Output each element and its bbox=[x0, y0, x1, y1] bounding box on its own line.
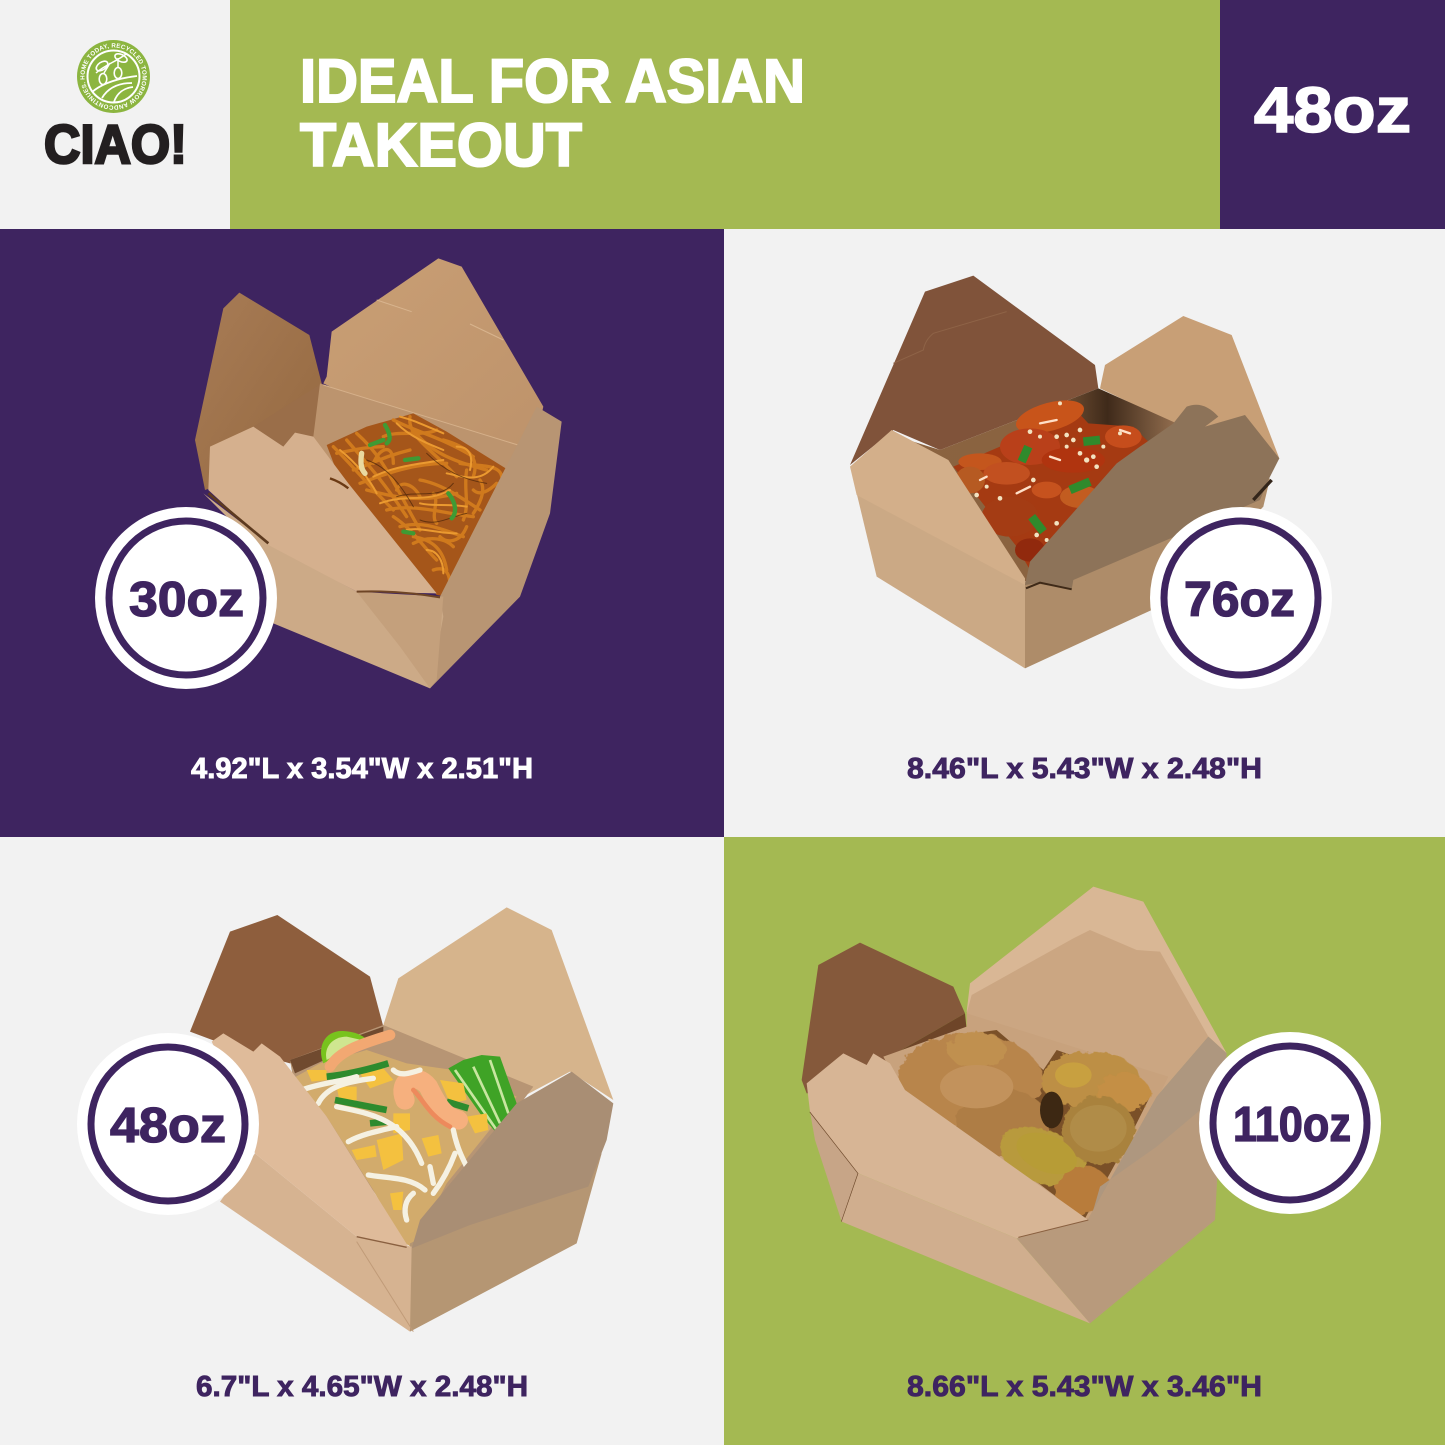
front left flap bbox=[850, 430, 1025, 585]
product: 30oz noodle box bbox=[195, 258, 562, 688]
left inner flap bbox=[195, 293, 323, 490]
left side panel bbox=[810, 1112, 858, 1222]
pad thai bbox=[290, 1031, 517, 1248]
panel: 30oz background bbox=[0, 229, 724, 837]
dimensions: 76oz: 8.46"L x 5.43"W x 2.48"H bbox=[907, 753, 1262, 785]
back flap bbox=[967, 887, 1227, 1097]
green onions bbox=[448, 1055, 517, 1133]
dimensions: 30oz: 4.92"L x 3.54"W x 2.51"H bbox=[191, 753, 533, 785]
right lid bbox=[1025, 405, 1279, 589]
right side panel bbox=[430, 407, 562, 688]
fried chicken bbox=[898, 1030, 1150, 1218]
panel: logo background bbox=[0, 0, 230, 229]
product: 48oz pad thai box bbox=[190, 907, 613, 1332]
interior wall bbox=[290, 1025, 533, 1247]
dimensions: 110oz: 8.66"L x 5.43"W x 3.46"H bbox=[907, 1371, 1262, 1403]
badge: 48oz bbox=[77, 1033, 259, 1215]
badge: 110oz: 110oz bbox=[1233, 1098, 1351, 1152]
right panel bbox=[1017, 1037, 1227, 1323]
back flap bbox=[383, 907, 613, 1100]
panel: 48oz background bbox=[0, 837, 724, 1445]
logo: CIAO! bbox=[44, 40, 187, 175]
front left body bbox=[857, 493, 1025, 668]
back wall bbox=[883, 1013, 1168, 1222]
product: 110oz fried chicken box bbox=[802, 887, 1227, 1323]
size label: 48oz: 48oz bbox=[1254, 74, 1411, 146]
front body bbox=[203, 493, 443, 688]
title: IDEAL FOR ASIAN bbox=[300, 47, 805, 115]
front left body bbox=[220, 1153, 412, 1332]
front right panel bbox=[410, 1153, 602, 1332]
badge: 76oz: 76oz bbox=[1184, 573, 1295, 627]
left inner flap bbox=[190, 915, 383, 1063]
front left flap bbox=[212, 1033, 408, 1247]
badge: 76oz bbox=[1150, 507, 1332, 689]
lime bbox=[321, 1031, 367, 1063]
badge: 30oz bbox=[95, 507, 277, 689]
panel: 76oz background bbox=[724, 229, 1445, 837]
front flap bbox=[208, 427, 437, 593]
front body bbox=[842, 1173, 1090, 1323]
left inner flap bbox=[850, 276, 1098, 465]
back flap bbox=[323, 258, 543, 470]
badge: 30oz: 30oz bbox=[129, 573, 244, 627]
panel: 110oz background bbox=[724, 837, 1445, 1445]
interior wall bbox=[887, 388, 1193, 583]
badge: 110oz bbox=[1199, 1032, 1381, 1214]
bean sprouts bbox=[302, 1070, 467, 1220]
right back flap bbox=[1100, 316, 1279, 493]
shrimp bbox=[330, 1035, 390, 1067]
product: 76oz sauced chicken box bbox=[850, 276, 1279, 668]
sauced chicken bbox=[953, 394, 1150, 570]
noodles bbox=[327, 413, 508, 597]
badge: 48oz: 48oz bbox=[110, 1099, 226, 1153]
dimensions: 48oz: 6.7"L x 4.65"W x 2.48"H bbox=[196, 1371, 528, 1403]
title bbox=[300, 47, 805, 179]
panel: title banner bbox=[230, 0, 1220, 229]
icon: logo seal bbox=[77, 40, 150, 113]
front right panel bbox=[1025, 478, 1270, 668]
title: TAKEOUT bbox=[300, 111, 582, 179]
logo wordmark: CIAO! bbox=[44, 113, 187, 175]
front flap bbox=[807, 1053, 1088, 1238]
left inner flap bbox=[802, 943, 965, 1093]
panel: size banner bbox=[1220, 0, 1445, 229]
back inner wall bbox=[313, 383, 527, 598]
right lid bbox=[412, 1072, 613, 1248]
